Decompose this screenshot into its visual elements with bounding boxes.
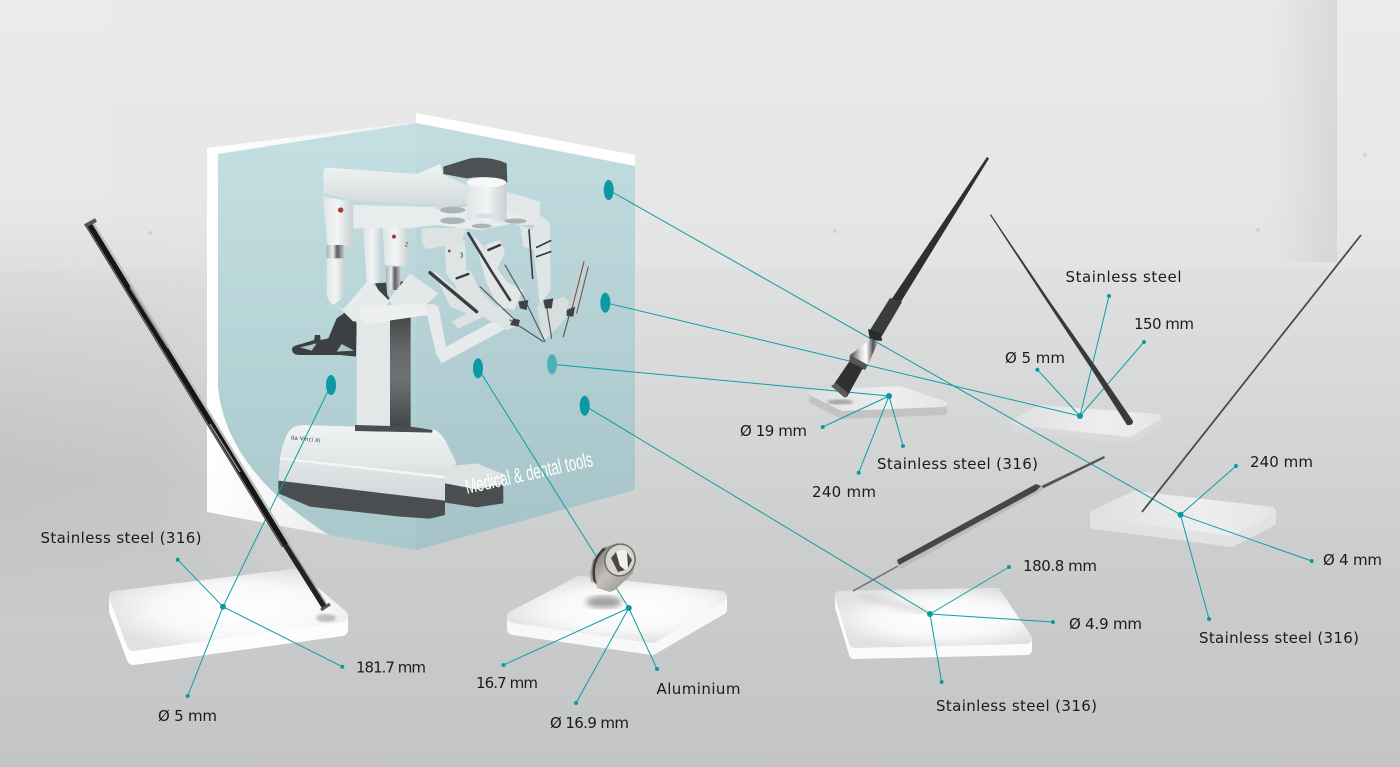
product: stepped cone instrument, 240 mm bbox=[547, 157, 1038, 501]
hub dot and end dots bbox=[1035, 294, 1146, 419]
tool: thin instrument bbox=[990, 214, 1133, 425]
callout lines bbox=[585, 406, 1053, 682]
main boom bbox=[353, 205, 528, 230]
label: 240 mm: 240 mm bbox=[812, 483, 876, 501]
label: diameter 16.9 mm: Ø 16.9 mm bbox=[550, 714, 629, 732]
tool: probe handle bbox=[853, 456, 1105, 591]
label: 150 mm: 150 mm bbox=[1134, 315, 1194, 333]
white box frame left bbox=[207, 122, 416, 535]
label: stainless steel 316: Stainless steel (316) bbox=[936, 697, 1097, 715]
surgical robot illustration bbox=[278, 158, 590, 519]
label: stainless steel 316: Stainless steel (316) bbox=[877, 455, 1038, 473]
instrument dark rods bbox=[430, 230, 588, 342]
hub dot and end dots bbox=[821, 393, 905, 475]
hub dot and end dots bbox=[1178, 464, 1314, 621]
right side arms bbox=[505, 192, 540, 225]
label: 240 mm: 240 mm bbox=[1250, 453, 1313, 471]
anchor dot bbox=[326, 375, 336, 395]
label: aluminium: Aluminium bbox=[656, 680, 740, 698]
platform: cone instrument bbox=[812, 389, 944, 416]
robot upper arms and instruments: 2 bbox=[405, 242, 409, 249]
callout lines bbox=[178, 385, 342, 696]
label: diameter 5 mm: Ø 5 mm bbox=[158, 707, 217, 725]
platform: left rod bbox=[115, 575, 342, 659]
label: diameter 4.9 mm: Ø 4.9 mm bbox=[1069, 615, 1142, 633]
robot upper arms and instruments: 3 bbox=[459, 251, 464, 259]
platform: implant bbox=[513, 582, 721, 649]
forward lower arm bbox=[425, 304, 509, 363]
robot upper arms and instruments bbox=[323, 158, 590, 363]
product: large left rod bbox=[40, 220, 426, 725]
anchor dot bbox=[600, 293, 610, 313]
teal left face bbox=[218, 123, 416, 550]
platforms under the products bbox=[115, 389, 1272, 659]
label: 181.7 mm: 181.7 mm bbox=[356, 659, 426, 677]
label: diameter 4 mm: Ø 4 mm bbox=[1323, 551, 1382, 569]
product: implant abutment bbox=[473, 358, 740, 732]
label: stainless steel 316: Stainless steel (316) bbox=[40, 529, 202, 547]
label: stainless steel: Stainless steel bbox=[1066, 268, 1182, 286]
head and hub bbox=[467, 182, 507, 222]
platform: thin instrument bbox=[1014, 408, 1158, 441]
robot holder, column and base: da Vinci Xi bbox=[290, 435, 321, 444]
label: diameter 19 mm: Ø 19 mm bbox=[740, 422, 807, 440]
anchor dot bbox=[473, 358, 483, 378]
product: middle thin instrument, 150 mm bbox=[600, 214, 1194, 425]
label: 180.8 mm: 180.8 mm bbox=[1023, 557, 1097, 575]
arm one bbox=[323, 197, 353, 247]
panel: medical and dental tools display box bbox=[207, 113, 635, 550]
callout lines bbox=[552, 364, 903, 473]
label: stainless steel 316: Stainless steel (316) bbox=[1199, 629, 1359, 647]
product: right needle, 240 mm bbox=[604, 180, 1382, 647]
teal right face bbox=[416, 123, 635, 550]
label: diameter 5 mm: Ø 5 mm bbox=[1005, 349, 1065, 367]
anchor dot bbox=[604, 180, 614, 200]
robot holder, column and base bbox=[278, 310, 503, 519]
callout lines bbox=[605, 296, 1144, 416]
rear column and arm three bbox=[363, 228, 382, 283]
label: 16.7 mm: 16.7 mm bbox=[476, 674, 538, 692]
tool: cone instrument bbox=[831, 157, 989, 398]
white box frame top right bbox=[416, 113, 635, 166]
anchor dot bbox=[580, 396, 590, 416]
platform: dental probe bbox=[840, 593, 1027, 654]
anchor dot: faded bbox=[547, 354, 557, 374]
product: dental probe, 180.8 mm bbox=[580, 396, 1142, 715]
arm two bbox=[383, 228, 409, 267]
instrument bodies bbox=[433, 270, 520, 330]
hub dot and end dots bbox=[176, 558, 344, 698]
tool: implant bbox=[590, 540, 640, 592]
hub dot and end dots bbox=[502, 605, 659, 705]
hub dot and end dots bbox=[927, 565, 1055, 684]
tool: needle bbox=[1142, 235, 1361, 512]
box title: Medical & dental tools: Medical & dental tools bbox=[463, 448, 595, 499]
callout lines bbox=[609, 190, 1312, 619]
platform: right needle bbox=[1094, 495, 1272, 543]
callout lines bbox=[478, 368, 657, 703]
tool: rod bbox=[85, 220, 330, 610]
central folding joints bbox=[332, 280, 390, 322]
